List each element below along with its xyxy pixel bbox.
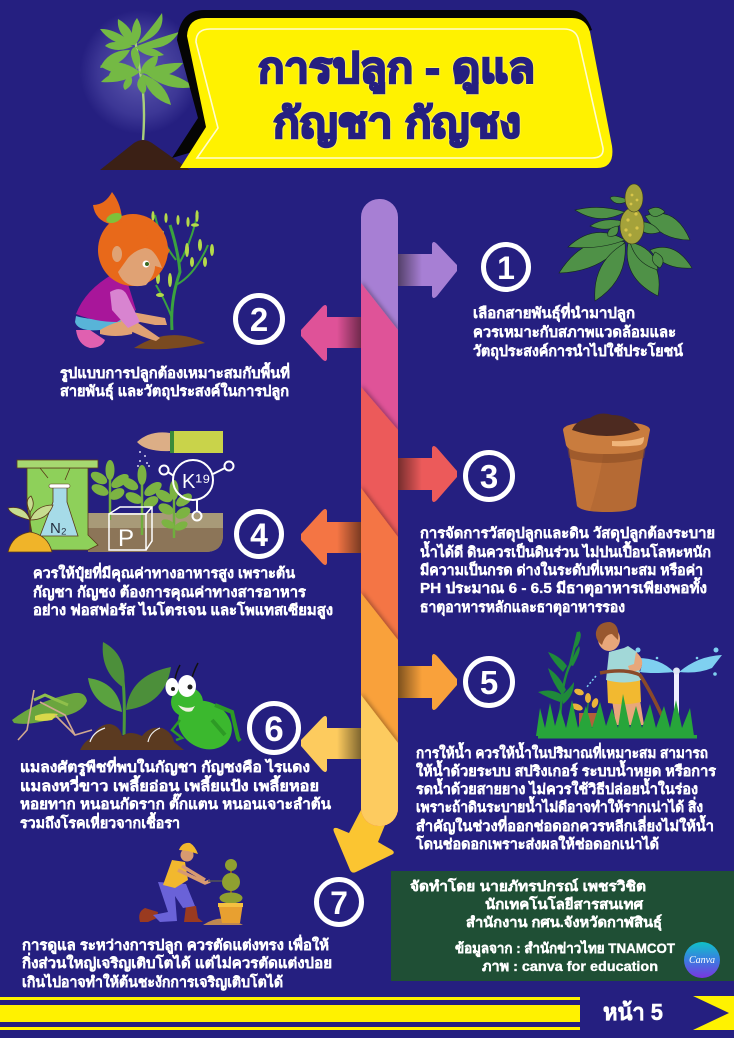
- arrow 1: [398, 242, 457, 298]
- credit text: [410, 877, 675, 974]
- text 3: การจัดการวัสดุปลูกและดิน วัสดุปลูกต้องระบาย: [420, 525, 715, 542]
- number 1: [484, 244, 528, 290]
- number 7: 7: [330, 885, 348, 921]
- falling seeds: [137, 451, 150, 467]
- hose: [600, 671, 662, 716]
- text 5: การให้น้ำ ควรให้น้ำในปริมาณที่เหมาะสม สามารถ: [416, 742, 708, 762]
- text 5: โดนช่อดอกเพราะส่งผลให้ช่อดอกเน่าได้: [415, 835, 659, 853]
- flask: [40, 486, 78, 536]
- number 4: [236, 512, 282, 556]
- number 4: 4: [250, 517, 268, 553]
- canva logo: Canva: [689, 955, 715, 966]
- hand with sleeve: [137, 432, 170, 451]
- text 4: กัญชา กัญชง ต้องการคุณค่าทางสารอาหาร: [33, 584, 306, 601]
- text 2: [60, 362, 290, 400]
- text 1: เลือกสายพันธุ์ที่นำมาปลูก: [473, 302, 635, 322]
- icon: flower pot: [563, 414, 650, 512]
- number 3: [466, 452, 512, 500]
- arrow 4: [301, 509, 361, 565]
- number 1: 1: [497, 250, 515, 286]
- text 6: แมลงหวี่ขาว เพลี้ยอ่อน เพลี้ยแป้ง เพลี้ยหอย: [20, 775, 319, 795]
- number 2: [236, 296, 282, 342]
- sprout and pile: [8, 532, 52, 552]
- text 7: เกินไปอาจทำให้ต้นชะงักการเจริญเติบโตได้: [22, 973, 283, 991]
- text 1: [473, 302, 683, 360]
- text 5: [415, 742, 716, 853]
- text 4: ควรให้ปุ๋ยที่มีคุณค่าทางอาหารสูง เพราะต้น: [33, 562, 295, 582]
- soil bed: [88, 513, 223, 552]
- text 3: [420, 525, 715, 616]
- icon: fertilizer illustration: N₂: [50, 520, 67, 537]
- credit text: จัดทำโดย นายภัทรปกรณ์ เพชรวิชิต: [410, 877, 646, 894]
- number 5: [466, 658, 512, 706]
- text 3: ธาตุอาหารหลักและธาตุอาหารรอง: [420, 600, 625, 616]
- cricket: [175, 663, 198, 693]
- title text: กัญชา กัญชง: [273, 100, 521, 147]
- number 3: 3: [480, 458, 498, 495]
- plants: [89, 460, 194, 538]
- arrow 3: [398, 446, 457, 502]
- icon: insects and seedling: [12, 642, 241, 759]
- number 6: 6: [264, 710, 284, 749]
- text 7: [22, 934, 332, 991]
- fertilizer bag: [27, 468, 98, 550]
- title text: การปลูก - ดูแล: [258, 45, 535, 94]
- text 3: PH ประมาณ 6 - 6.5 มีธาตุอาหารเพียงพอทั้ง: [420, 577, 707, 597]
- text 5: เพราะถ้าดินระบายน้ำไม่ดีอาจทำให้รากเน่าได้ สิ่ง: [416, 796, 703, 816]
- cube P: [109, 507, 152, 552]
- arrow head: [333, 808, 394, 873]
- title banner: [172, 10, 612, 168]
- number 7: [316, 880, 362, 924]
- boy: [612, 700, 644, 725]
- text 6: หอยทาก หนอนกัดราก ตั๊กแตน หนอนเจาะลำต้น: [20, 793, 331, 813]
- text 7: กิ่งส่วนใหญ่เจริญเติบโตได้ แต่ไม่ควรตัดแต่งบ่อย: [22, 952, 332, 972]
- number 2: 2: [250, 301, 268, 338]
- icon: boy watering plants: [536, 622, 722, 738]
- title text: [258, 45, 535, 147]
- text 4: [33, 562, 333, 619]
- text 6: แมลงศัตรูพืชที่พบในกัญชา กัญชงคือ ไรแดง: [20, 756, 310, 776]
- panel: credits: [391, 871, 734, 981]
- number 5: 5: [480, 664, 498, 701]
- text 2: รูปแบบการปลูกต้องเหมาะสมกับพื้นที่: [60, 362, 290, 382]
- text 2: สายพันธุ์ และวัตถุประสงค์ในการปลูก: [60, 382, 289, 400]
- potted plant: [579, 713, 599, 727]
- arrow shaft segments: [361, 199, 398, 840]
- text 5: รดน้ำด้วยสายยาง ไม่ควรใช้วิธีปล่อยน้ำในร่อง: [416, 778, 698, 798]
- canva logo: [684, 942, 720, 978]
- icon: title cannabis seedling: [80, 10, 200, 170]
- credit text: นักเทคโนโลยีสารสนเทศ: [485, 895, 644, 912]
- text 1: วัตถุประสงค์การนำไปใช้ประโยชน์: [473, 342, 683, 360]
- text 4: อย่าง ฟอสฟอรัส ไนโตรเจน และโพแทสเซียมสูง: [33, 601, 333, 619]
- credit text: ข้อมูลจาก : สำนักข่าวไทย TNAMCOT: [455, 939, 675, 957]
- icon: gardener trimming topiary: [139, 843, 243, 925]
- icon: cannabis plant: [559, 184, 692, 301]
- arrow 6: [301, 716, 361, 772]
- text 7: การดูแล ระหว่างการปลูก ควรตัดแต่งทรง เพื่อให้: [22, 934, 329, 954]
- K19 atom: K¹⁹: [182, 471, 211, 493]
- text 5: ให้น้ำด้วยระบบ สปริงเกอร์ ระบบน้ำหยด หรือการ: [416, 760, 716, 780]
- arrow 2: [301, 305, 361, 361]
- sprinkler: [674, 672, 679, 718]
- number 6: [250, 704, 298, 752]
- text 5: สำคัญในช่วงที่ออกช่อดอกควรหลีกเลี่ยงไม่ให้น้ำ: [416, 815, 714, 835]
- text 3: น้ำได้ดี ดินควรเป็นดินร่วน ไม่ปนเปื้อนโลหะหนัก: [420, 541, 711, 561]
- icon: fertilizer illustration: [8, 431, 234, 552]
- grasshopper: [12, 693, 87, 724]
- cube P: P: [118, 525, 134, 552]
- text 1: ควรเหมาะกับสภาพแวดล้อมและ: [473, 324, 676, 341]
- arrow 5: [398, 654, 457, 710]
- text 6: รวมถึงโรคเหี่ยวจากเชื้อรา: [20, 812, 180, 832]
- credit text: ภาพ : canva for education: [482, 958, 658, 974]
- page label: หน้า 5: [603, 999, 663, 1025]
- icon: girl planting: [75, 192, 214, 349]
- footer band: [0, 996, 734, 1030]
- tall reed: [560, 632, 578, 720]
- seedling: [123, 680, 124, 735]
- timeline arrow: [333, 199, 398, 873]
- text 6: [20, 756, 331, 832]
- credit text: สำนักงาน กศน.จังหวัดกาฬสินธุ์: [466, 914, 662, 931]
- K19 atom: [160, 460, 234, 520]
- text 3: มีความเป็นกรด ด่างในระดับที่เหมาะสม หรือค่า: [420, 559, 703, 579]
- grass: [536, 694, 694, 736]
